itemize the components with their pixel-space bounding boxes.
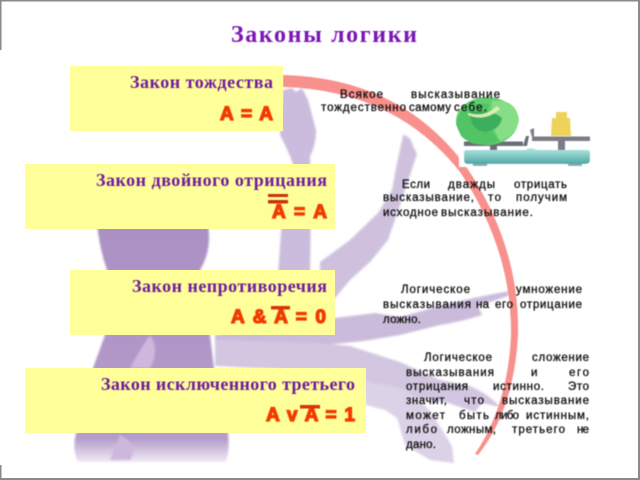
text block: excluded middle explanation: высказывания xyxy=(406,367,494,379)
text block: identity explanation xyxy=(321,89,500,114)
text block: excluded middle explanation xyxy=(406,352,589,451)
formula: non-contradiction: A & A = 0 xyxy=(231,307,326,328)
text block: excluded middle explanation: сложение xyxy=(532,352,589,364)
figure: many-armed person xyxy=(74,88,510,463)
text block: double negation explanation: дважды xyxy=(448,179,495,191)
scales feet xyxy=(473,164,582,166)
text block: excluded middle explanation: и xyxy=(531,367,537,379)
raised arm two xyxy=(320,135,417,305)
text block: double negation explanation: Если xyxy=(402,179,430,191)
text block: excluded middle explanation: быть xyxy=(459,410,489,422)
cabbage xyxy=(456,97,519,145)
heading: law of double negation: Закон двойного отрицания xyxy=(96,170,327,190)
lowest arm and hand xyxy=(360,380,454,463)
white backing of scales picture xyxy=(459,150,592,167)
panel: law of identity xyxy=(70,66,283,131)
text block: double negation explanation: высказывание, xyxy=(383,192,474,204)
text block: identity explanation: себе. xyxy=(454,102,487,114)
text block: excluded middle explanation: третьего xyxy=(512,424,565,436)
text block: non-contradiction explanation: на xyxy=(476,299,490,311)
text block: non-contradiction explanation: его xyxy=(495,299,513,311)
weight xyxy=(551,112,571,136)
text block: excluded middle explanation: истинно. xyxy=(493,381,544,393)
text block: identity explanation: Всякое xyxy=(340,89,383,101)
raised arm one xyxy=(278,88,316,275)
panel: law of double negation xyxy=(25,164,335,229)
text block: non-contradiction explanation: Логическое xyxy=(401,284,470,296)
text block: excluded middle explanation: либо xyxy=(495,410,519,422)
text block: double negation explanation: отрицать xyxy=(514,179,567,191)
text block: excluded middle explanation: значит, xyxy=(406,395,447,407)
formula: double negation: A = A xyxy=(272,202,327,223)
text block: double negation explanation: получим xyxy=(516,192,567,204)
text block: non-contradiction explanation xyxy=(383,284,582,326)
formula: identity: A = A xyxy=(220,104,273,125)
horizontal arm to the hand xyxy=(215,291,510,350)
text block: identity explanation: самому xyxy=(409,102,451,114)
heading: law of excluded middle: Закон исключенного третьего xyxy=(101,374,355,394)
text block: excluded middle explanation: либо xyxy=(406,424,437,436)
text block: excluded middle explanation: Это xyxy=(568,381,589,393)
text block: non-contradiction explanation: умножение xyxy=(516,284,582,296)
text block: double negation explanation xyxy=(383,179,567,219)
formula: excluded middle: A v A = 1 xyxy=(266,405,355,426)
text block: excluded middle explanation: что xyxy=(464,395,484,407)
text block: identity explanation: тождественно xyxy=(321,102,406,114)
text block: excluded middle explanation: его xyxy=(569,367,589,379)
text block: non-contradiction explanation: отрицание xyxy=(520,299,582,311)
figure torso xyxy=(74,225,229,462)
right pan xyxy=(530,128,590,150)
text block: double negation explanation: то xyxy=(488,192,501,204)
panel: law of excluded middle xyxy=(25,368,366,433)
heading: law of non-contradiction: Закон непротиворечия xyxy=(132,276,327,296)
text block: excluded middle explanation: отрицания xyxy=(406,381,468,393)
text block: excluded middle explanation: истинным, xyxy=(526,410,589,422)
text block: excluded middle explanation: может xyxy=(406,410,446,422)
formula: double negation xyxy=(268,194,327,223)
text block: excluded middle explanation: Логическое xyxy=(424,352,492,364)
text block: excluded middle explanation: дано. xyxy=(406,439,436,451)
text block: excluded middle explanation: не xyxy=(577,424,589,436)
icon: scales with cabbage and weight xyxy=(456,97,592,167)
scales base xyxy=(464,148,590,164)
text block: excluded middle explanation: высказывание xyxy=(502,395,589,407)
highlights on the torso xyxy=(110,335,155,460)
heading: law of identity: Закон тождества xyxy=(130,72,273,92)
text block: double negation explanation: исходное xyxy=(383,207,438,219)
text block: double negation explanation: высказывание. xyxy=(441,207,533,219)
text block: non-contradiction explanation: высказывания xyxy=(383,299,471,311)
title: Законы логики xyxy=(231,22,417,48)
text block: excluded middle explanation: ложным, xyxy=(447,424,496,436)
left pan xyxy=(464,136,529,150)
panel: law of non-contradiction xyxy=(70,270,335,335)
red arc xyxy=(283,75,518,455)
lower arm to the right xyxy=(215,340,500,412)
text block: non-contradiction explanation: ложно. xyxy=(383,314,421,326)
text block: identity explanation: высказывание xyxy=(411,89,500,101)
